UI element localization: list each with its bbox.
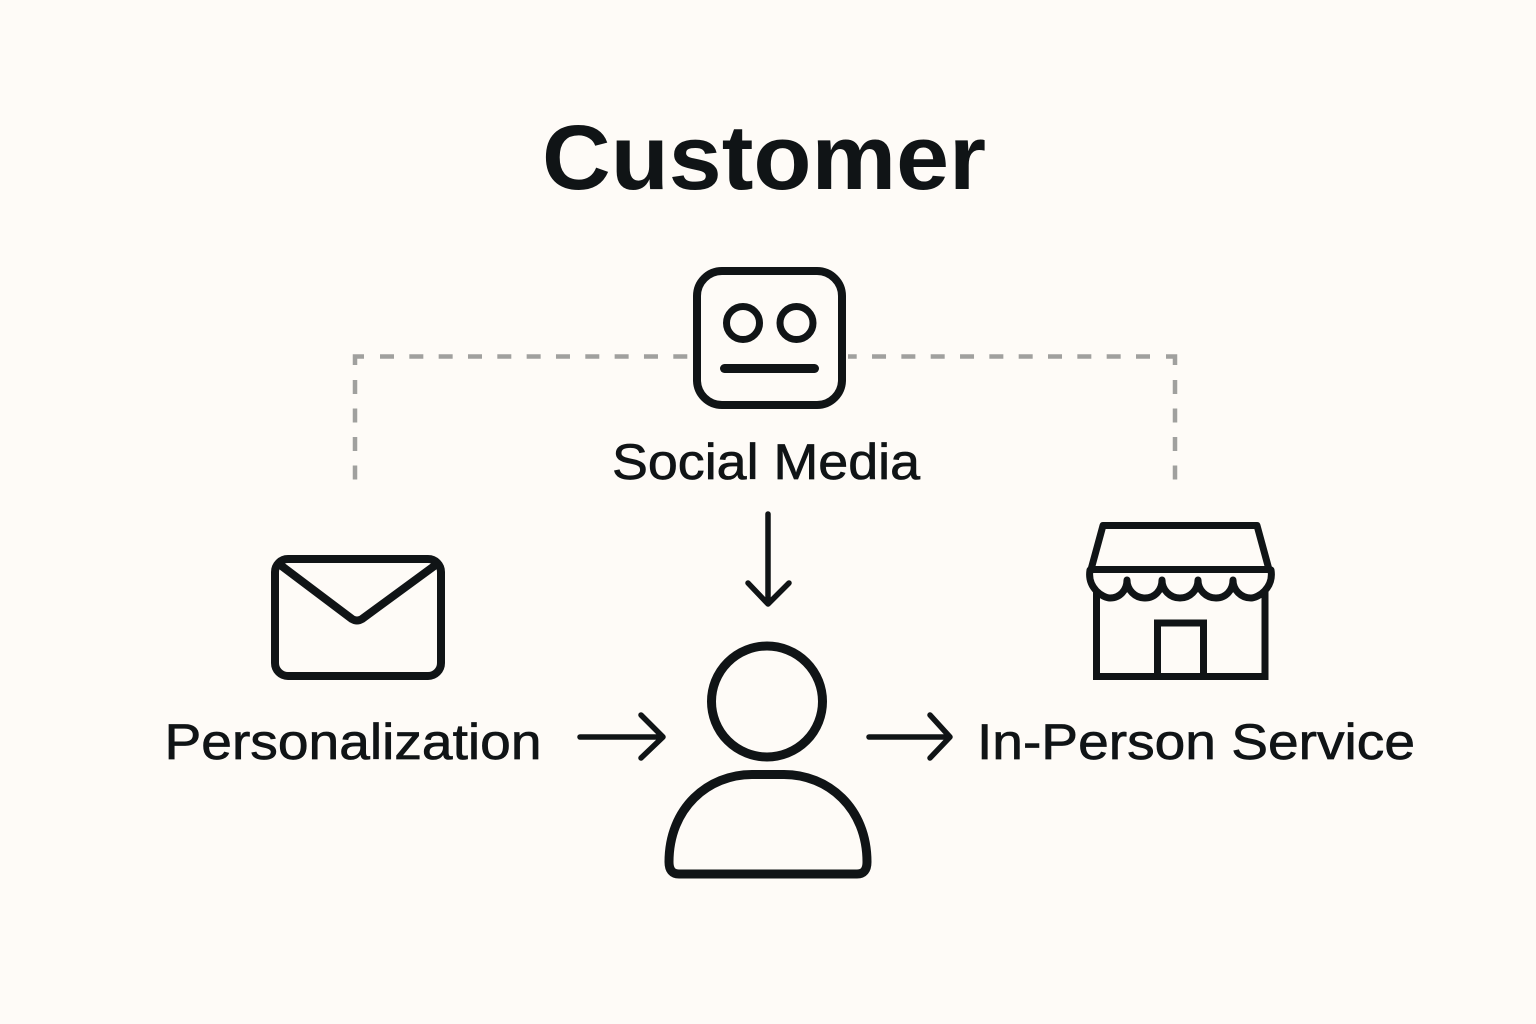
dashed connector: right xyxy=(848,356,1175,481)
arrow: customer to in-person service xyxy=(869,715,950,758)
arrow: social media to customer xyxy=(748,514,789,604)
label: social media: Social Media xyxy=(612,434,920,490)
icon: envelope xyxy=(275,559,441,676)
icon: storefront xyxy=(1090,526,1271,676)
label: in-person service: In-Person Service xyxy=(977,714,1415,770)
title: Customer xyxy=(542,107,986,209)
icon: customer person xyxy=(669,646,867,874)
label: personalization: Personalization xyxy=(164,714,542,770)
icon: social media face xyxy=(697,271,842,405)
arrow: personalization to customer xyxy=(580,715,663,758)
dashed connector: left xyxy=(355,356,690,481)
